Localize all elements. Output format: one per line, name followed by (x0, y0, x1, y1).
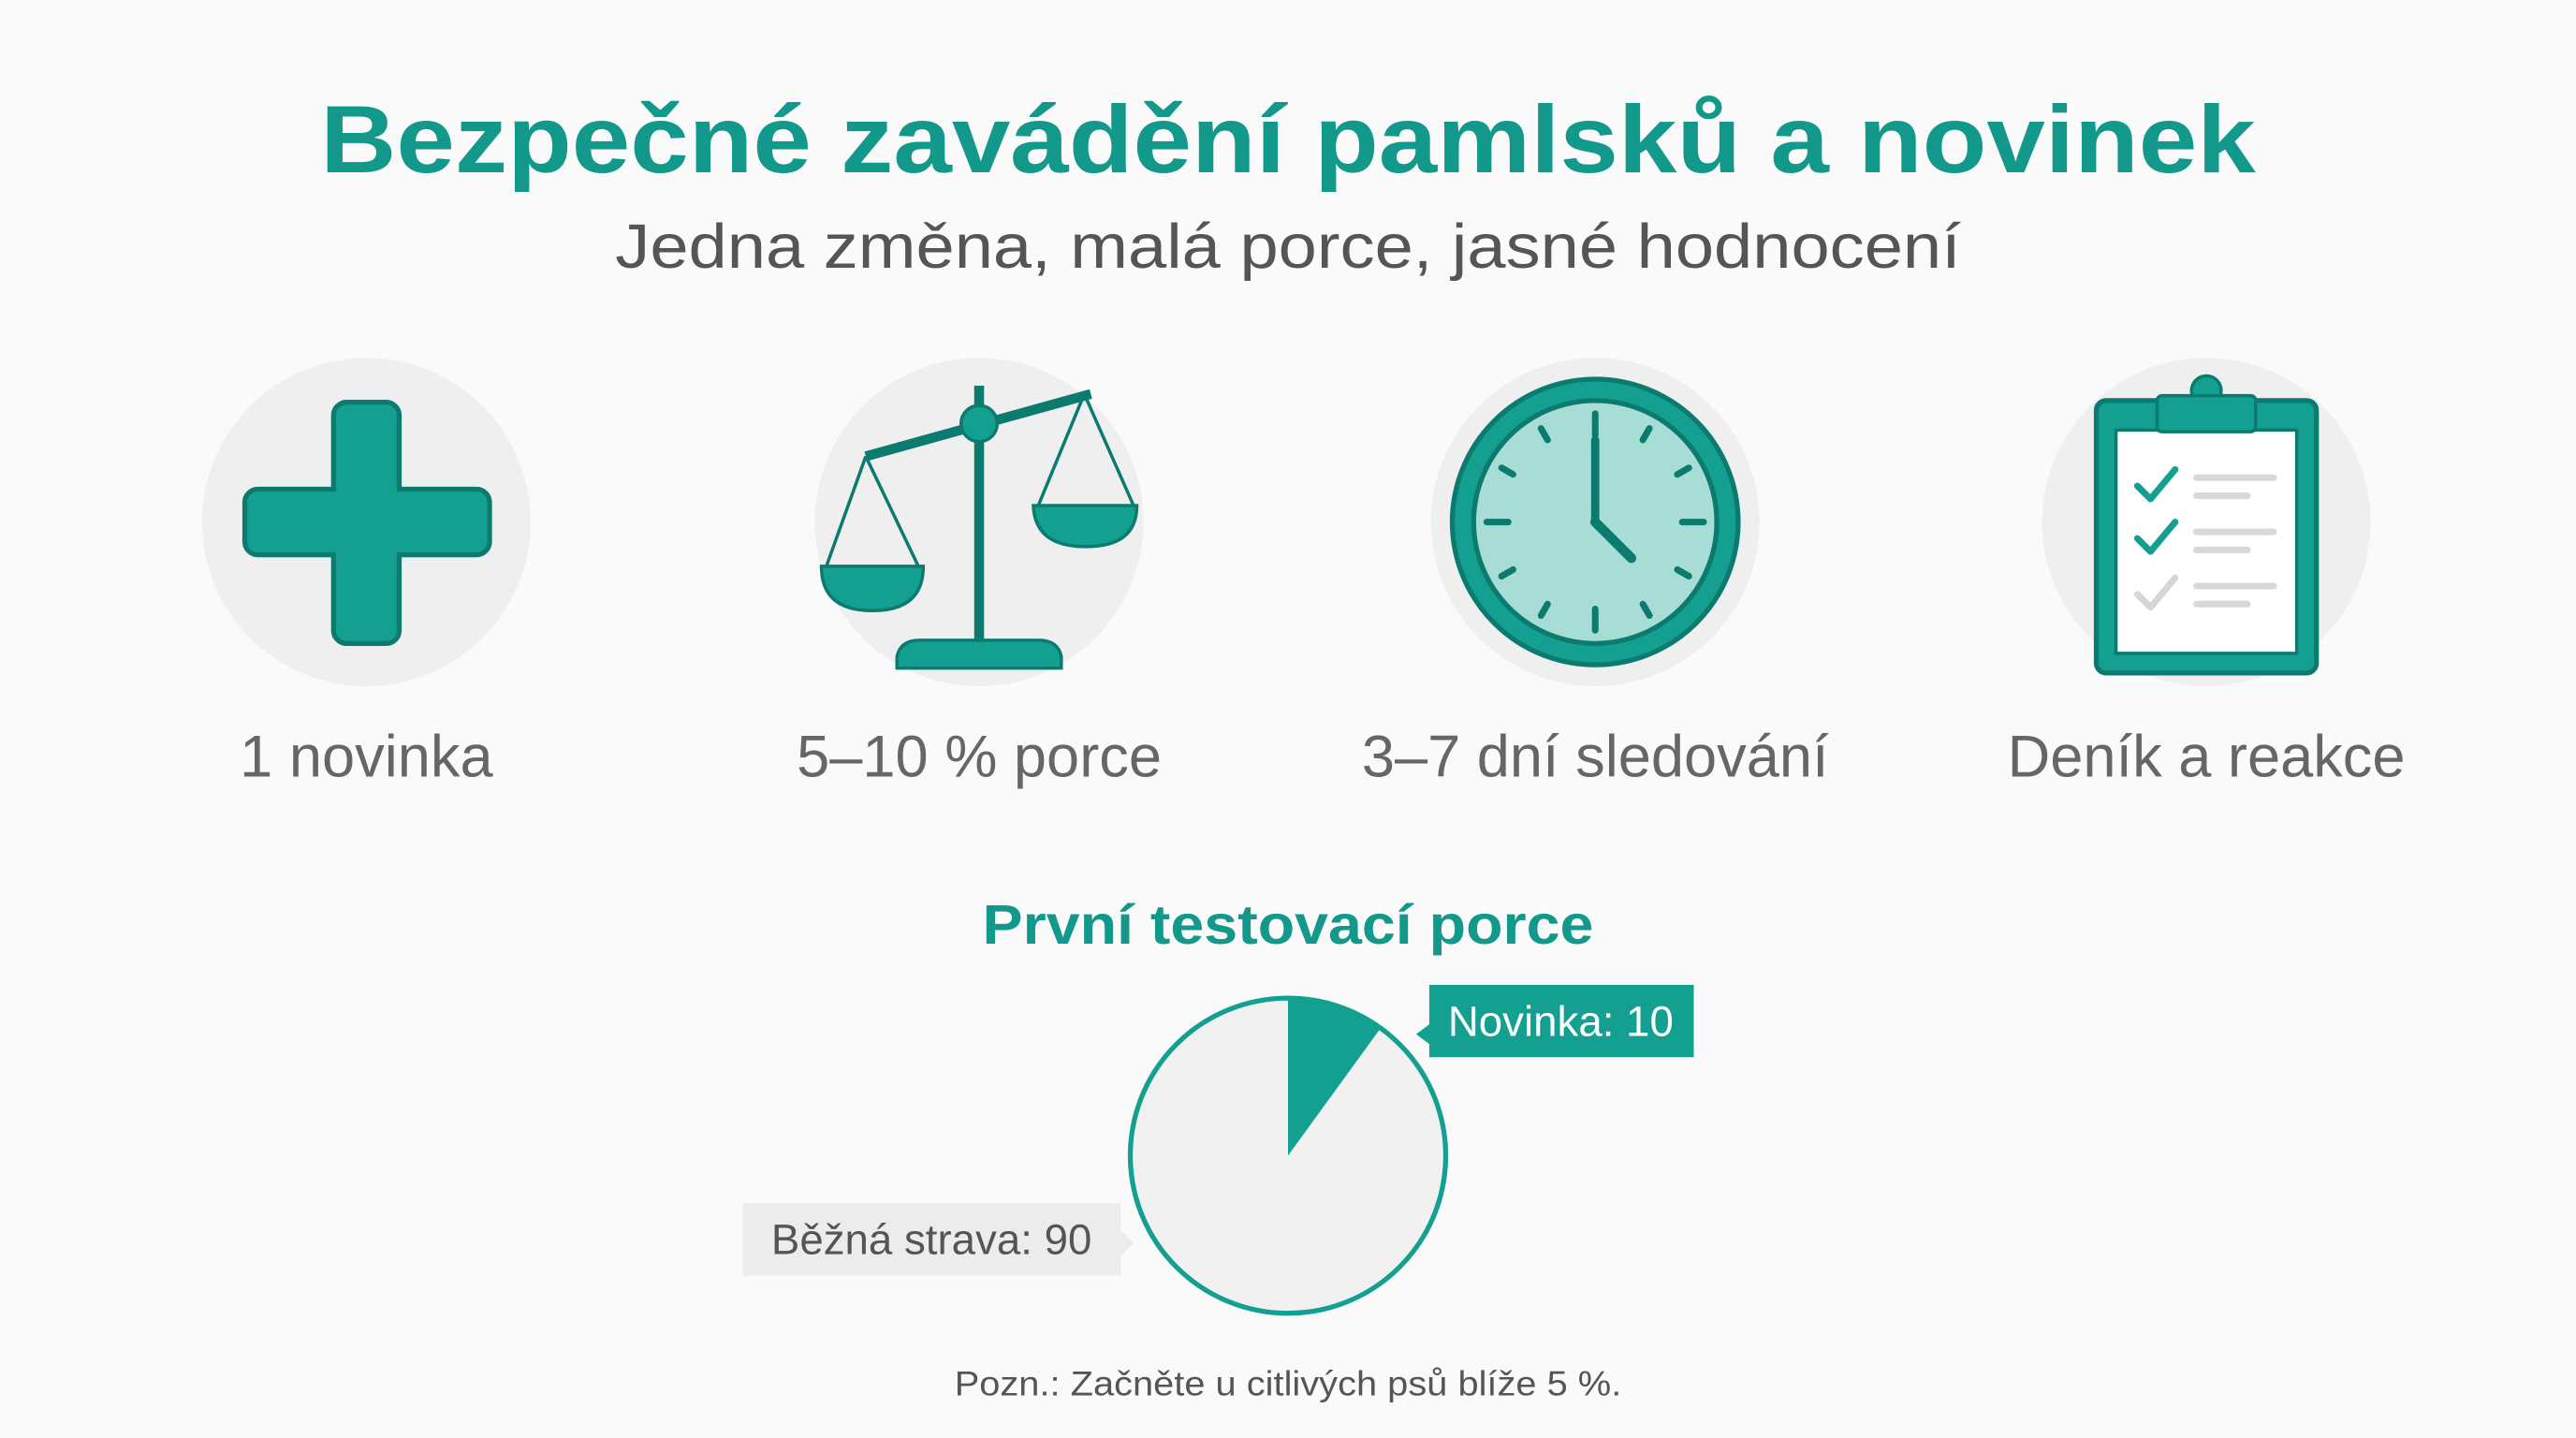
subtitle: Jedna změna, malá porce, jasné hodnocení (615, 213, 1961, 282)
labels (240, 724, 2406, 789)
pie chart (1131, 998, 1445, 1313)
callout: bezna strava: Běžná strava: 90 (771, 1216, 1091, 1264)
icon: scale (815, 358, 1144, 686)
title: Bezpečné zavádění pamlsků a novinek (320, 86, 2256, 193)
callout: bezna strava (742, 1203, 1134, 1275)
icon: plus (202, 358, 531, 686)
callout: novinka (1416, 985, 1694, 1057)
chart title: První testovací porce (983, 893, 1593, 956)
labels: Deník a reakce (2008, 724, 2406, 789)
labels: 3–7 dní sledování (1362, 724, 1829, 789)
icon: clock (1431, 358, 1760, 686)
labels: 5–10 % porce (797, 724, 1162, 789)
callout: novinka: Novinka: 10 (1448, 997, 1674, 1045)
note: Pozn.: Začněte u citlivých psů blíže 5 %. (955, 1364, 1621, 1402)
icon: clipboard (2042, 358, 2371, 686)
labels: 1 novinka (240, 724, 493, 789)
